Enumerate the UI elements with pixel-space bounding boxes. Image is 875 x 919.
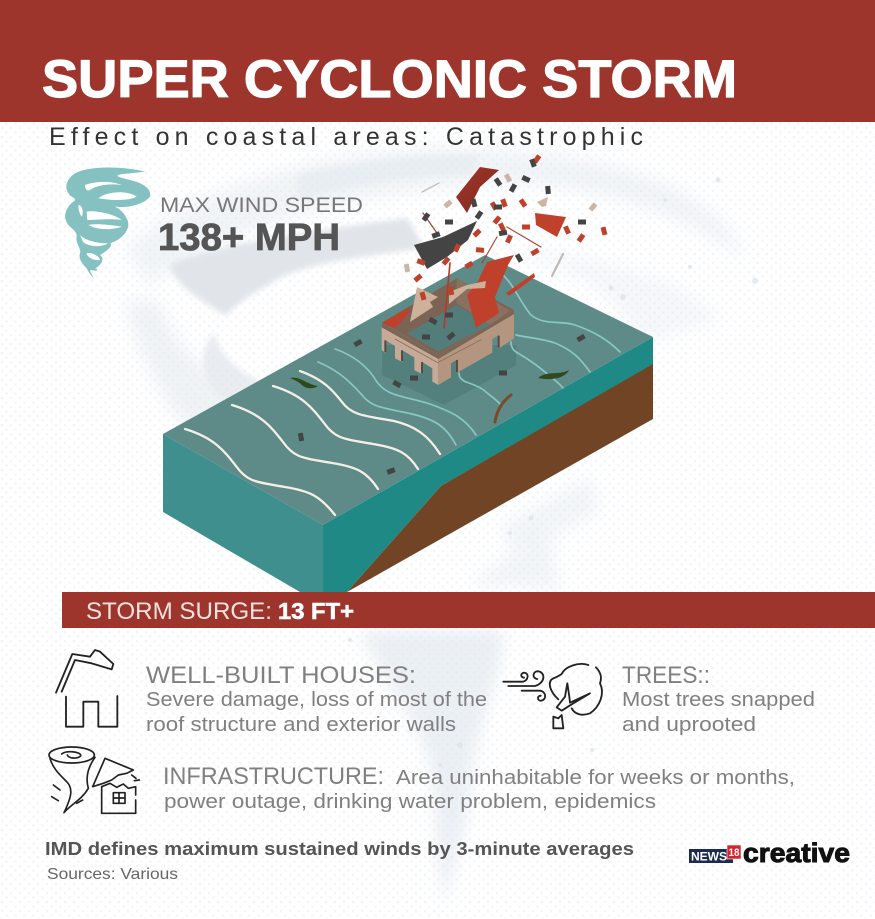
logo: News18 creative: creative bbox=[743, 838, 850, 868]
block left face bbox=[163, 434, 323, 592]
text: trees: TREES:: bbox=[622, 662, 710, 689]
text: infrastructure bbox=[163, 763, 795, 813]
subtitle: Effect on coastal areas: Catastrophic bbox=[49, 123, 643, 151]
coastal block illustration bbox=[163, 154, 653, 592]
leaves bbox=[290, 370, 569, 388]
floor bbox=[407, 305, 490, 352]
storm surge bar bbox=[62, 592, 875, 628]
block right face soil bbox=[347, 364, 653, 592]
branch bbox=[495, 395, 511, 422]
faint spray droplets bbox=[348, 178, 758, 767]
storm surge value: 13 FT+ bbox=[278, 598, 354, 624]
debris dark fragments bbox=[298, 158, 586, 475]
walls bbox=[382, 323, 438, 385]
wind speed block bbox=[158, 193, 363, 259]
building bbox=[382, 278, 514, 385]
icon: wind and tree bbox=[503, 664, 602, 728]
building shadow bbox=[382, 345, 516, 405]
text: well-built houses: roof structure and exterior walls bbox=[146, 714, 456, 736]
text: infrastructure: power outage, drinking water problem, epidemics bbox=[164, 791, 656, 813]
waves cream bbox=[185, 371, 440, 515]
storm surge label: STORM SURGE: bbox=[86, 598, 272, 625]
logo: News18 creative: 18 bbox=[728, 847, 740, 859]
title banner bbox=[0, 0, 875, 122]
debris large pieces bbox=[382, 167, 566, 328]
text: trees bbox=[622, 662, 815, 736]
icon: damaged house bbox=[56, 650, 117, 727]
text: trees: Most trees snapped bbox=[622, 689, 815, 711]
text: well-built houses bbox=[146, 662, 487, 736]
roof rim bbox=[382, 310, 514, 359]
text: well-built houses: WELL-BUILT HOUSES: bbox=[146, 662, 416, 689]
icon: tornado hitting house bbox=[49, 747, 139, 813]
roof interior bbox=[382, 278, 514, 355]
text: well-built houses: Severe damage, loss of most of the bbox=[146, 689, 487, 711]
debris tan fragments bbox=[404, 173, 597, 272]
text: trees: and uprooted bbox=[622, 714, 756, 736]
wind speed label: MAX WIND SPEED bbox=[160, 193, 363, 217]
debris red fragments bbox=[413, 154, 607, 301]
waves teal bbox=[318, 275, 620, 445]
footnote: IMD defines maximum sustained winds by 3-minute averages bbox=[45, 839, 634, 859]
logo: News18 creative bbox=[689, 838, 850, 868]
block top surface bbox=[163, 255, 653, 525]
text: infrastructure: Area uninhabitable for weeks or months, bbox=[396, 767, 795, 789]
logo: News18 creative: NEWS bbox=[691, 850, 727, 864]
debris lines bbox=[422, 183, 563, 328]
block right face water bbox=[323, 337, 653, 592]
title: SUPER CYCLONIC STORM bbox=[42, 50, 737, 109]
text: infrastructure: INFRASTRUCTURE: bbox=[163, 763, 384, 790]
icon: tornado bbox=[65, 167, 150, 278]
sources: Sources: Various bbox=[47, 866, 178, 883]
wind speed value: 138+ MPH bbox=[158, 217, 340, 259]
pillar shadows bbox=[385, 336, 499, 373]
